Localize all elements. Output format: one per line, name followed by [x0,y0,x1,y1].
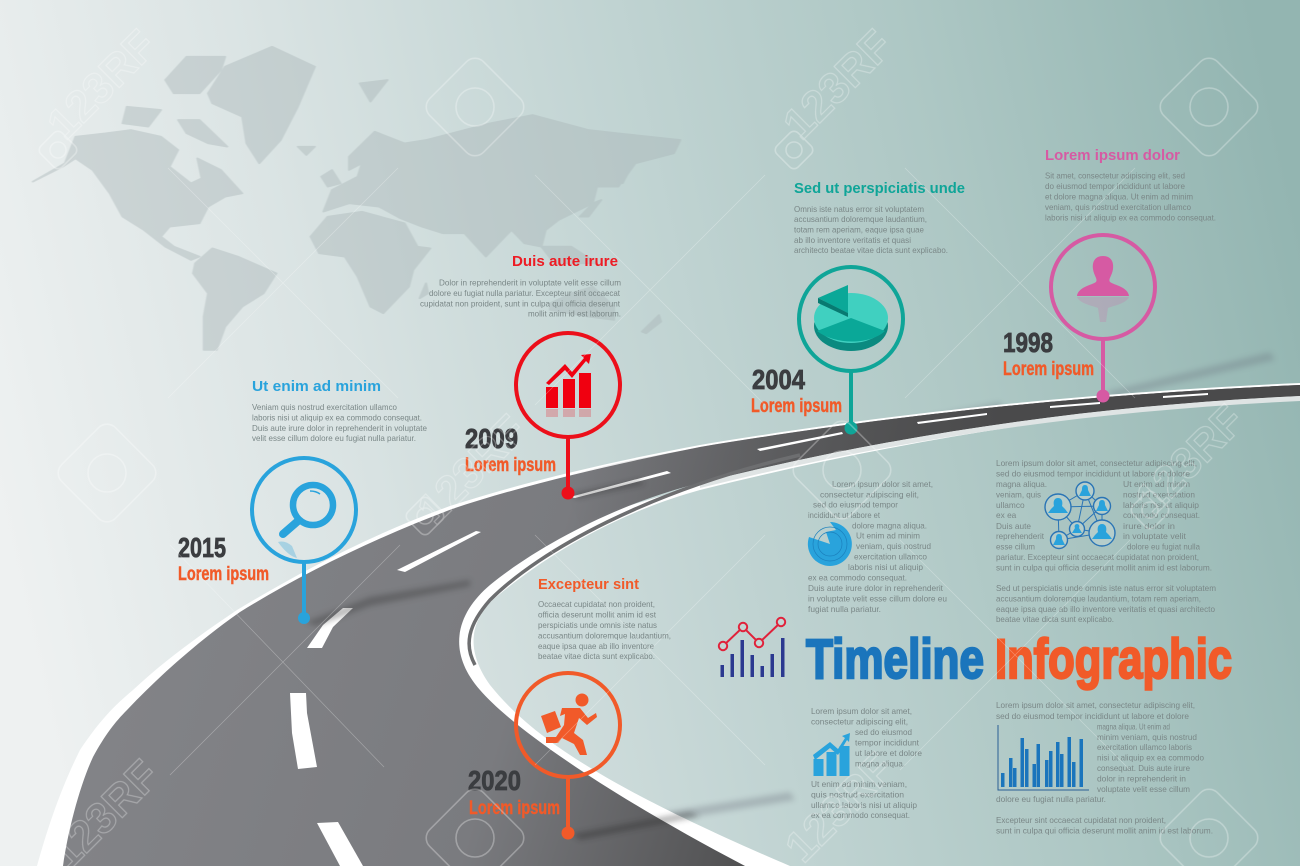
text lines: commodo consequat. [1123,510,1200,520]
text lines: sed do eiusmod tempor [813,500,898,510]
description: Omnis iste natus error sit voluptatem [794,204,924,214]
description: ab illo inventore veritatis et quasi [794,235,911,245]
road outer white edge [37,383,1300,866]
text lines: beatae vitae dicta sunt explicabo. [996,614,1114,624]
text lines: voluptate velit esse cillum [1097,784,1190,794]
text lines: in voluptate velit [1123,531,1187,541]
heading: Ut enim ad minim [252,379,381,395]
text lines: reprehenderit [996,531,1045,541]
world map [33,47,680,350]
text lines: incididunt ut labore et [808,510,881,520]
road shadows on background [640,352,1275,824]
text lines: exercitation ullamco laboris [1097,742,1192,752]
inner white road edge [451,392,1300,866]
description: do eiusmod tempor incididunt ut labore [1045,181,1185,191]
label: Lorem ipsum [1003,359,1094,380]
description: mollit anim id est laborum. [528,308,621,318]
description: officia deserunt mollit anim id est [538,610,657,620]
text lines: magna aliqua. [996,479,1047,489]
heading: Lorem ipsum dolor [1045,148,1180,164]
label: Lorem ipsum [465,455,556,476]
description: accusantium doloremque laudantium, [538,630,671,640]
text block with bar chart [996,700,1213,836]
text lines: sunt in culpa qui officia deserunt mollit anim id est laborum. [996,562,1212,572]
label: Lorem ipsum [469,798,560,819]
text lines: fugiat nulla pariatur. [808,604,881,614]
text lines: consectetur adipiscing elit, [811,716,908,726]
text lines: pariatur. Excepteur sint occaecat cupidatat non proident, [996,552,1199,562]
text lines: eaque ipsa quae ab illo inventore veritatis et quasi architecto [996,604,1215,614]
description: Occaecat cupidatat non proident, [538,599,655,609]
description: Sit amet, consectetur adipiscing elit, sed [1045,170,1185,180]
milestone 2020 [468,577,671,840]
description: laboris nisi ut aliquip ex ea commodo consequat. [252,412,422,422]
text lines: ullamco [996,500,1025,510]
text lines: exercitation ullamco [854,552,927,562]
description: velit esse cillum dolore eu fugiat nulla pariatur. [252,433,416,443]
description: Duis aute irure dolor in reprehenderit in voluptate [252,423,427,433]
text block with network icon [996,458,1216,624]
text lines: Excepteur sint occaecat cupidatat non proident, [996,815,1166,825]
text lines: ex ea commodo consequat. [811,810,910,820]
icon: running businessman [541,694,597,755]
text lines: nostrud exercitation [1123,490,1195,500]
description: accusantium doloremque laudantium, [794,214,927,224]
pin [1051,235,1155,402]
text lines: sed do eiusmod tempor incididunt ut labore et dolore [996,711,1189,721]
text lines: laboris nisi ut aliquip [1123,500,1199,510]
text lines: Sed ut perspiciatis unde omnis iste natus error sit voluptatem [996,583,1216,593]
text lines: magna aliqua. [855,758,905,768]
text lines: Ut enim ad minim [856,530,920,540]
lane dashes [290,393,1208,866]
year: 2009 [465,423,518,454]
text lines: Lorem ipsum dolor sit amet, [811,706,912,716]
description: totam rem aperiam, eaque ipsa quae [794,224,924,234]
text lines: Duis aute [996,521,1031,531]
milestone 2015 [178,379,427,624]
heading: Excepteur sint [538,577,639,593]
description: perspiciatis unde omnis iste natus [538,620,657,630]
text lines: Duis aute irure dolor in reprehenderit [808,583,944,593]
icon: people network [1045,482,1115,548]
brand text: 123RF [774,21,902,149]
pin [252,458,356,624]
pin [799,267,903,434]
description: Veniam quis nostrud exercitation ullamco [252,402,397,412]
text block with radial icon [808,479,947,614]
pin shadows on road [306,480,700,840]
description: dolore eu fugiat nulla pariatur. Excepteur sint occaecat [429,288,621,298]
year: 2015 [178,532,226,563]
text lines: Ut enim ad minim [1123,479,1190,489]
brand text: 123RF [408,406,536,534]
text lines: veniam, quis nostrud [856,541,931,551]
text block with growth icon [811,706,922,820]
heading: Sed ut perspiciatis unde [794,181,965,197]
icon: radial chart [808,522,852,566]
description: beatae vitae dicta sunt explicabo. [538,651,655,661]
description: cupidatat non proident, sunt in culpa qui officia deserunt [420,298,621,308]
text lines: consectetur adipiscing elit, [820,490,919,500]
text lines: dolor in reprehenderit in [1097,774,1186,784]
milestone 1998 [1003,148,1216,402]
label: Lorem ipsum [751,396,842,417]
title word: Infographic: Infographic [995,627,1232,690]
description: veniam, quis nostrud exercitation ullamco [1045,202,1191,212]
text lines: esse cillum [996,542,1035,552]
title word: Timeline: Timeline [806,627,984,690]
year: 1998 [1003,327,1053,358]
description: architecto beatae vitae dicta sunt explicabo. [794,245,948,255]
text lines [811,706,922,820]
pin [516,333,620,500]
text lines: ullamco laboris nisi ut aliquip [811,800,917,810]
light lower kerb [700,396,1300,488]
inner kerb shadow [469,455,800,665]
description: eaque ipsa quae ab illo inventore [538,641,654,651]
heading: Duis aute irure [512,254,618,270]
text lines: laboris nisi ut aliquip [848,562,923,572]
label: Lorem ipsum [178,564,269,585]
icon: growth bars [813,733,850,776]
description: laboris nisi ut aliquip ex ea commodo consequat. [1045,212,1216,222]
text lines: Ut enim ad minim veniam, [811,779,907,789]
year: 2020 [468,765,521,796]
text lines: tempor incididunt [855,738,920,748]
icon: magnifying glass [278,485,333,558]
text lines: dolore eu fugiat nulla [1127,542,1200,552]
text lines: dolore magna aliqua. [852,520,927,530]
text lines: ut labore et dolore [855,748,922,758]
text lines: irure dolor in [1123,521,1175,531]
text lines: sed do eiusmod tempor incididunt ut labore et dolore [996,468,1190,478]
milestone 2009 [420,254,621,500]
text lines: dolore eu fugiat nulla pariatur. [996,794,1106,804]
text lines: Lorem ipsum dolor sit amet, consectetur adipiscing elit, [996,700,1195,710]
milestone 2004 [751,181,965,434]
pin [516,673,620,840]
icon: growth chart [546,354,591,417]
icon: pie chart [814,285,888,351]
text lines: magna aliqua. Ut enim ad [1097,722,1170,732]
text lines [808,479,947,614]
text lines: consequat. Duis aute irure [1097,763,1190,773]
icon: chart with trend line [719,618,785,677]
icon: person [1077,256,1129,322]
description [420,278,621,318]
right road darkening [560,385,1300,525]
description [794,204,948,255]
road [37,383,1300,866]
text lines: sed do eiusmod [855,727,912,737]
text lines: ex ea [996,510,1017,520]
description [1045,170,1216,222]
text lines: Lorem ipsum dolor sit amet, consectetur adipiscing elit, [996,458,1197,468]
brand text: 123RF [38,21,166,149]
year: 2004 [752,364,805,395]
text lines: sunt in culpa qui officia deserunt mollit anim id est laborum. [996,826,1213,836]
description: Dolor in reprehenderit in voluptate velit esse cillum [439,278,621,288]
description: et dolore magna aliqua. Ut enim ad minim [1045,192,1193,202]
icon: bar chart [998,725,1089,790]
text lines: minim veniam, quis nostrud [1097,732,1197,742]
text lines [996,700,1213,836]
text lines: quis nostrud exercitation [811,790,904,800]
text lines: ex ea commodo consequat. [808,572,907,582]
text lines: veniam, quis [996,490,1041,500]
diagonal lines [168,168,1135,775]
text lines: in voluptate velit esse cillum dolore eu [808,594,947,604]
description [252,402,427,443]
text lines: accusantium doloremque laudantium, totam rem aperiam, [996,594,1201,604]
brand text: 123RF [1126,396,1254,524]
text lines: nisi ut aliquip ex ea commodo [1097,752,1204,762]
description [538,599,671,661]
text lines: Lorem ipsum dolor sit amet, [832,479,933,489]
title [719,618,1232,690]
text lines [996,458,1216,624]
road surface [63,385,1300,866]
